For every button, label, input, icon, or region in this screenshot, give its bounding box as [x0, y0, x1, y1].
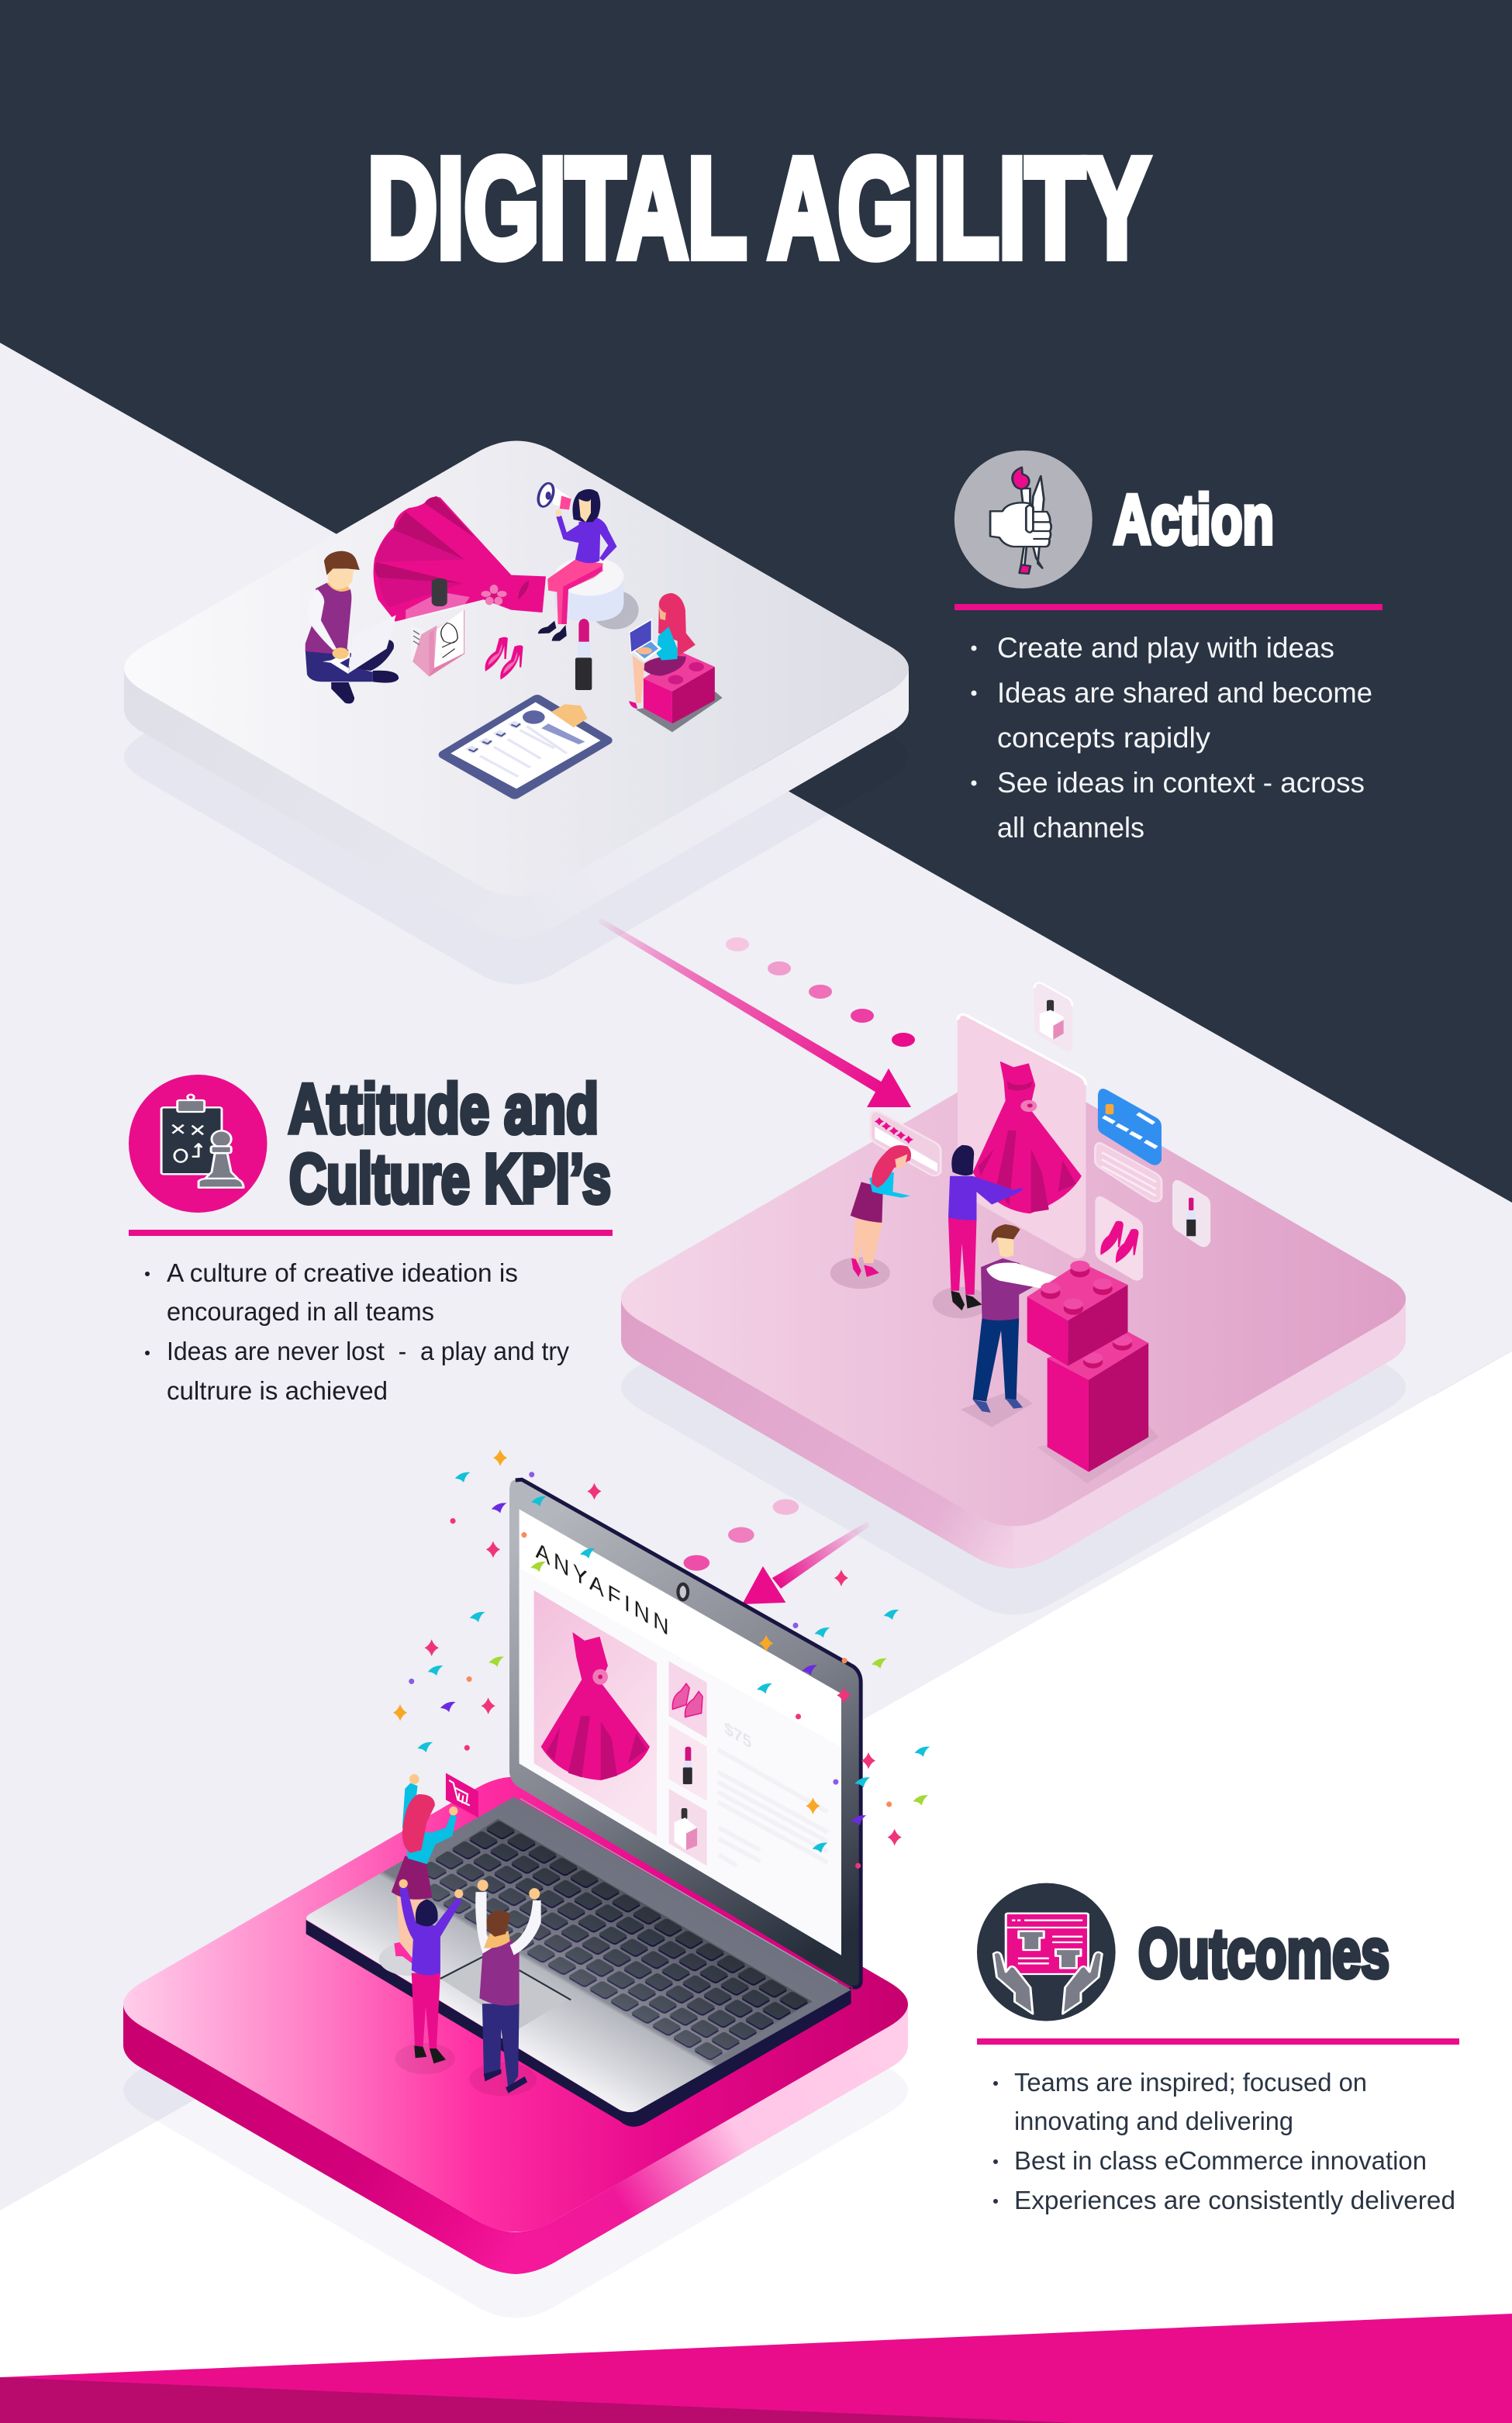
outcomes icon circle — [977, 1883, 1116, 2021]
flower brooch — [482, 585, 507, 605]
background: white lower area — [0, 1351, 1512, 2423]
attitude bullet list — [145, 1258, 569, 1405]
icon: hands holding web shop window — [993, 1914, 1102, 2014]
bottom pink band — [0, 2314, 1512, 2423]
attitude icon circle — [129, 1075, 268, 1213]
laptop base — [306, 1797, 851, 2127]
woman on lego block — [629, 593, 723, 732]
product details: $75 — [724, 1717, 751, 1752]
attitude bullet list: Ideas are never lost - a play and try — [167, 1337, 569, 1365]
platform 3: magenta isometric slab — [123, 1777, 908, 2318]
woman bending — [830, 1145, 911, 1289]
scene 1: ideation illustration — [306, 482, 723, 795]
trackpad lines — [440, 1956, 571, 2000]
woman in purple cheering — [395, 1879, 463, 2074]
dots trail to platform 2 — [726, 937, 915, 1047]
outcomes bullet list: innovating and delivering — [1014, 2107, 1293, 2135]
arrow: attitude to outcomes — [742, 1521, 870, 1604]
outcomes bullet list: Teams are inspired; focused on — [1014, 2068, 1367, 2097]
action divider — [954, 604, 1383, 610]
dress tile — [534, 1590, 657, 1836]
icon: hand holding brush and pencil — [990, 468, 1051, 574]
action bullet list: concepts rapidly — [997, 722, 1211, 754]
arrow: action to attitude — [598, 918, 911, 1107]
scene 2: attitude illustration — [830, 983, 1210, 1483]
product thumbnails — [669, 1662, 707, 1866]
outcomes heading: Outcomes — [1138, 1915, 1389, 1993]
lipstick — [575, 619, 592, 690]
man with laptop — [306, 551, 399, 703]
trail dots — [683, 1500, 799, 1571]
large dress panel — [958, 1014, 1086, 1258]
scene 3: laptop and outcomes illustration — [306, 1449, 930, 2127]
product details — [718, 1717, 827, 1866]
outcomes bullet list — [993, 2068, 1455, 2214]
attitude heading — [288, 1071, 611, 1218]
projector and perfume box — [406, 578, 470, 677]
shoes card — [1095, 1196, 1143, 1281]
title: DIGITAL AGILITY — [368, 129, 1149, 287]
outcomes bullet list: Best in class eCommerce innovation — [1014, 2146, 1427, 2175]
display white — [520, 1509, 841, 1955]
attitude bullet list: cultrure is achieved — [167, 1376, 388, 1405]
platform 1: grey isometric slab — [124, 440, 909, 985]
action icon circle — [954, 450, 1093, 588]
woman in blue cheering — [379, 1774, 457, 1976]
icon: clipboard and chess pawn — [161, 1095, 243, 1188]
dress pattern — [374, 496, 546, 622]
attitude heading: Culture KPI’s — [289, 1141, 611, 1218]
confetti — [393, 1449, 930, 1869]
woman with megaphone on stool — [536, 482, 639, 641]
stacked lego blocks — [1027, 1261, 1158, 1483]
action bullet list: See ideas in context - across — [997, 767, 1365, 799]
attitude divider — [129, 1230, 613, 1236]
keyboard — [413, 1819, 813, 2062]
action heading: Action — [1113, 481, 1274, 559]
lipstick card — [1172, 1180, 1210, 1247]
background: dark navy top — [0, 0, 1512, 1396]
attitude bullet list: encouraged in all teams — [167, 1297, 434, 1326]
heels — [485, 637, 523, 680]
man cheering — [469, 1879, 541, 2096]
attitude heading: Attitude and — [288, 1071, 599, 1148]
shopping cart card — [446, 1773, 478, 1817]
perfume card — [1034, 983, 1072, 1051]
man with blocks — [961, 1224, 1057, 1427]
action bullet list — [971, 632, 1372, 844]
laptop screen — [509, 1479, 862, 1988]
outcomes bullet list: Experiences are consistently delivered — [1014, 2186, 1455, 2214]
action bullet list: Ideas are shared and become — [997, 677, 1372, 709]
review stars card — [871, 1111, 941, 1175]
background: light lavender diagonal band — [0, 343, 1512, 2211]
action bullet list: Create and play with ideas — [997, 632, 1334, 664]
action bullet list: all channels — [997, 812, 1144, 844]
text card — [1095, 1143, 1162, 1202]
clipboard — [444, 699, 606, 795]
blue card — [1098, 1089, 1162, 1165]
outcomes divider — [977, 2038, 1459, 2045]
store logo: ANYAFINN — [536, 1537, 669, 1641]
attitude bullet list: A culture of creative ideation is — [167, 1258, 518, 1287]
platform 2: pink isometric slab — [621, 1072, 1406, 1614]
woman in purple — [933, 1145, 1023, 1318]
